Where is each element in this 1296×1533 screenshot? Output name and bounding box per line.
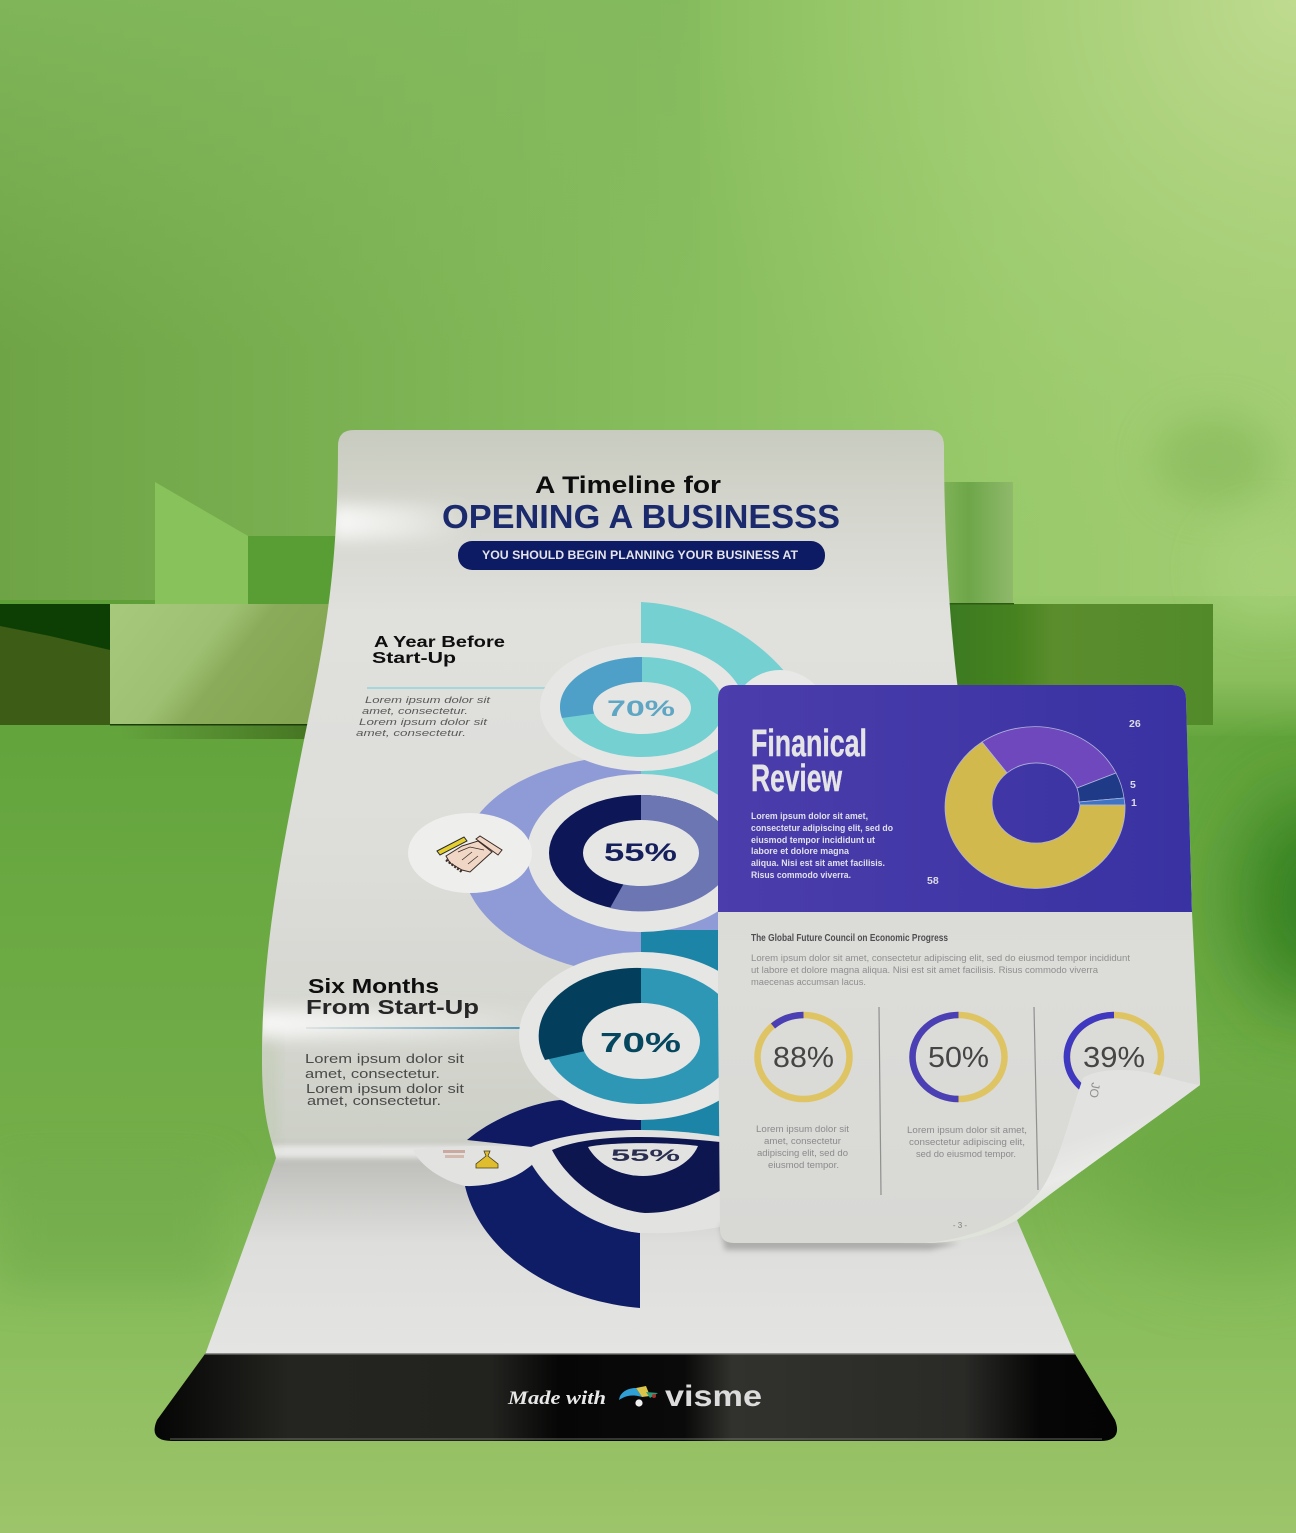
gauge 88% caption: eiusmod tempor. — [768, 1160, 839, 1170]
section 1 body text: amet, consectetur. — [362, 706, 468, 717]
card header body text: Risus commodo viverra. — [751, 870, 851, 881]
gauge 50%: 50% — [928, 1042, 989, 1074]
card shadow — [720, 1225, 960, 1250]
donut labels: 1 — [1131, 797, 1137, 809]
card header body text: consectetur adipiscing elit, sed do — [751, 823, 893, 834]
section 1 donut 70% — [540, 643, 744, 771]
gauge 50% caption — [907, 1125, 1027, 1159]
council heading: The Global Future Council on Economic Progress — [751, 932, 948, 944]
icon: folded badge with chess pieces — [418, 1150, 532, 1186]
gauge 39%: 39% — [1083, 1042, 1145, 1074]
card header body text: aliqua. Nisi est sit amet facilisis. — [751, 858, 885, 869]
section 3 body text — [305, 1052, 465, 1108]
card paragraph: ut labore et dolore magna aliqua. Nisi est sit amet facilisis. Risus commodo viverra — [751, 965, 1098, 975]
made with label: Made with — [507, 1388, 606, 1409]
donut labels: 58 — [927, 875, 939, 887]
divider lines — [879, 1007, 1038, 1195]
right stacked green blocks — [944, 482, 1213, 725]
gauge 88% caption: Lorem ipsum dolor sit — [756, 1124, 850, 1134]
gauge 50% caption: Lorem ipsum dolor sit amet, — [907, 1125, 1027, 1135]
section 2: lavender right side — [666, 911, 718, 930]
section 1 connector line — [367, 687, 545, 689]
page number: - 3 - — [953, 1221, 967, 1230]
gauge 50% caption: sed do eiusmod tempor. — [916, 1149, 1016, 1159]
section 1 heading: A Year Before — [374, 634, 505, 651]
section 1 body text: amet, consectetur. — [356, 728, 466, 739]
section 3 body text: Lorem ipsum dolor sit — [306, 1082, 465, 1096]
card header body text: eiusmod tempor incididunt ut — [751, 835, 876, 846]
visme wordmark: visme — [665, 1380, 762, 1413]
card paragraph — [752, 954, 1130, 985]
gauge 88% caption: amet, consectetur — [764, 1136, 841, 1146]
gauge 39% — [1067, 1015, 1161, 1099]
section 3 body text: amet, consectetur. — [307, 1094, 441, 1108]
donut chart — [945, 727, 1125, 888]
section 1 body text — [356, 695, 490, 739]
section 3 heading: From Start-Up — [306, 997, 479, 1019]
card header panel — [718, 685, 1192, 912]
section 3 heading: Six Months — [308, 976, 439, 998]
card header body text: Lorem ipsum dolor sit amet, — [751, 811, 868, 822]
gauge 50% caption: consectetur adipiscing elit, — [909, 1137, 1025, 1147]
card header body text — [751, 811, 893, 881]
section 3 donut 70%: 70% — [600, 1027, 681, 1058]
section 1 body text: Lorem ipsum dolor sit — [359, 717, 488, 728]
section 2 donut 55%: 55% — [604, 839, 677, 867]
section 3 body text: amet, consectetur. — [305, 1067, 440, 1081]
section 3 connector line — [306, 1027, 520, 1029]
headline: OPENING A BUSINESSS — [442, 498, 840, 535]
gauge 88% caption: adipiscing elit, sed do — [757, 1148, 848, 1158]
card title — [752, 728, 866, 792]
left stacked green blocks — [0, 482, 350, 726]
title: A Timeline for — [535, 472, 721, 499]
section 2: lavender half circle — [470, 760, 641, 966]
subtitle pill — [458, 541, 825, 570]
card title: Finanical — [751, 723, 867, 765]
side icon circle behind card — [745, 670, 814, 685]
section 4: navy arc above fold — [467, 1100, 641, 1147]
section 3: blue half circle right — [641, 930, 720, 1136]
section 1 donut 70%: 70% — [607, 696, 675, 721]
infographic sheet — [205, 430, 1075, 1355]
section 1 heading — [372, 634, 505, 667]
card paragraph: maecenas accumsan lacus. — [751, 977, 866, 987]
curled page corner — [925, 1070, 1200, 1243]
section 1: teal quarter circle — [641, 602, 795, 800]
gauge 88%: 88% — [773, 1042, 834, 1074]
card title: Review — [751, 758, 842, 800]
section 1 body text: Lorem ipsum dolor sit — [365, 695, 490, 706]
section 1 heading: Start-Up — [372, 650, 456, 667]
section 4 folded donut 55%: 55% — [611, 1146, 680, 1165]
card header body text: labore et dolore magna — [751, 846, 850, 857]
subtitle pill: YOU SHOULD BEGIN PLANNING YOUR BUSINESS AT — [482, 550, 798, 562]
icon: visme logo — [619, 1386, 658, 1407]
section 4 folded donut 55% — [531, 1130, 730, 1233]
section 3 heading — [306, 976, 479, 1019]
gauge 50% — [912, 1015, 1004, 1099]
section 3 body text: Lorem ipsum dolor sit — [305, 1052, 465, 1066]
financial review card — [718, 685, 1200, 1243]
curled page corner: JO — [1086, 1081, 1103, 1099]
section 3 donut 70% — [519, 952, 719, 1120]
card paragraph: Lorem ipsum dolor sit amet, consectetur adipiscing elit, sed do eiusmod tempor incididunt — [751, 953, 1131, 963]
icon: handshake — [408, 813, 532, 893]
donut labels: 26 — [1129, 718, 1141, 730]
black footer strip — [155, 1353, 1117, 1441]
donut labels: 5 — [1130, 779, 1136, 791]
gauge 88% — [758, 1015, 850, 1099]
section 4: navy arc below fold — [465, 1165, 640, 1308]
gauge 88% caption — [756, 1124, 850, 1170]
donut labels — [927, 718, 1141, 887]
section 2 donut 55% — [528, 774, 718, 932]
